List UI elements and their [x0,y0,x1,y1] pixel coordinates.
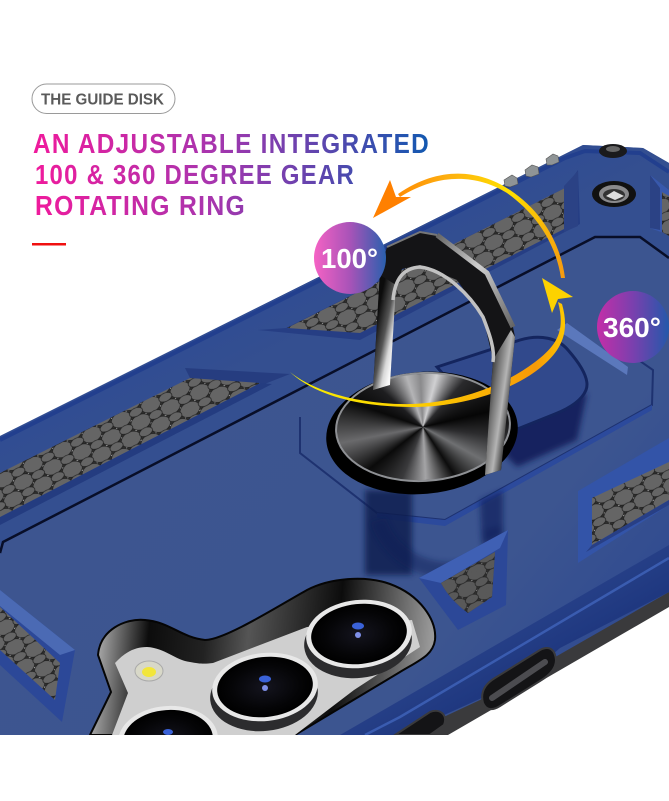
badge 360 degrees: 360° [603,312,661,343]
lens top [304,600,412,678]
red accent line [32,243,66,246]
slot recess [437,337,587,467]
small centre grip strip [419,530,508,630]
phone case illustration [0,144,669,735]
blue case body [0,145,669,735]
upper grip strip [258,170,580,340]
bottom left grip strip [0,590,75,722]
rotation arrow upper [373,174,565,278]
side button small [395,711,445,735]
rotation arrow lower [290,278,573,407]
black bumper edge [432,592,669,735]
main heading: ROTATING RING [35,190,246,221]
panel outline [0,237,669,553]
disc base shadow [326,372,518,494]
top right grip strip [650,175,669,236]
ring base octagon outline [300,352,653,520]
lower right grip strip [578,438,669,563]
main screw [592,181,636,207]
top screw [599,144,627,158]
camera island [89,578,436,735]
ring drop shadows [365,490,412,575]
left grip strip [0,368,290,525]
light bar [557,323,628,375]
main heading: 100 & 360 DEGREE GEAR [35,159,355,190]
lens bottom [119,706,218,735]
badge 100 degrees: 100° [321,243,378,274]
main heading [33,128,430,221]
ring base disc [332,367,514,487]
right post details [564,176,578,229]
lower side band [340,545,669,735]
main heading: AN ADJUSTABLE INTEGRATED [33,128,430,159]
badge 360 degrees [597,291,669,363]
upper frame band [0,145,669,545]
lens middle [210,652,318,732]
top side buttons [504,154,559,187]
badge 100 degrees [314,222,386,294]
ring [373,232,515,475]
flash [135,661,163,681]
tag: the guide disk: THE GUIDE DISK [41,92,164,108]
tag: the guide disk [32,84,175,114]
side button large [482,648,556,709]
